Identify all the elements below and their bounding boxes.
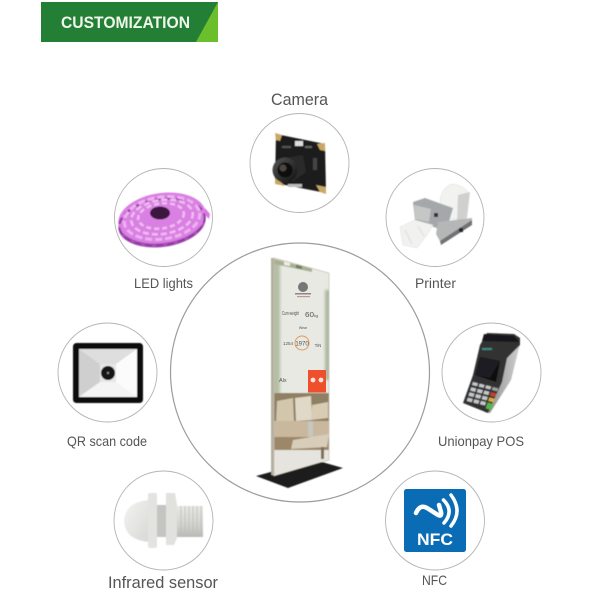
- banner: customization: [41, 2, 218, 42]
- icon: nfc logo: NFC: [417, 530, 453, 549]
- app screen content: Wear: [299, 326, 308, 330]
- app screen content: [279, 282, 326, 392]
- icon: pos terminal: [463, 333, 520, 413]
- icon: infrared sensor: [124, 493, 203, 548]
- icon: thermal printer: [400, 184, 472, 248]
- keypad keys: [466, 382, 498, 410]
- panel: nfc: [386, 471, 484, 588]
- panel: printer: [386, 168, 484, 291]
- app screen content: 1254: [283, 341, 294, 346]
- banner title: CUSTOMIZATION: [61, 14, 190, 32]
- label: infrared sensor: Infrared sensor: [108, 574, 218, 592]
- icon: black base: [256, 460, 343, 488]
- icon: camera module: [272, 133, 326, 194]
- label: unionpay pos: Unionpay POS: [438, 433, 524, 449]
- panel: led lights: [114, 168, 212, 291]
- red button panel: [308, 370, 326, 392]
- panel: camera: [250, 91, 349, 212]
- panel: qr scan code: [58, 323, 157, 449]
- label: qr scan code: QR scan code: [67, 433, 147, 449]
- panel: central display: [170, 243, 430, 502]
- icon: led strip: [115, 187, 210, 253]
- label: camera: Camera: [271, 91, 329, 109]
- app screen content: TiN: [315, 343, 321, 348]
- app screen content: 60: [305, 310, 314, 319]
- mirror display: [271, 255, 331, 480]
- app screen content: 1970: [295, 342, 309, 348]
- label: nfc: NFC: [422, 572, 447, 588]
- app screen content: kg: [314, 313, 318, 318]
- icon: qr scanner: [73, 343, 143, 403]
- label: led lights: LED lights: [134, 275, 193, 291]
- panel: infrared sensor: [108, 471, 218, 592]
- app screen content: Cum-weight: [282, 311, 299, 317]
- label: printer: Printer: [415, 275, 456, 291]
- panel: unionpay pos: [438, 323, 541, 449]
- app screen content: Alx: [279, 378, 287, 384]
